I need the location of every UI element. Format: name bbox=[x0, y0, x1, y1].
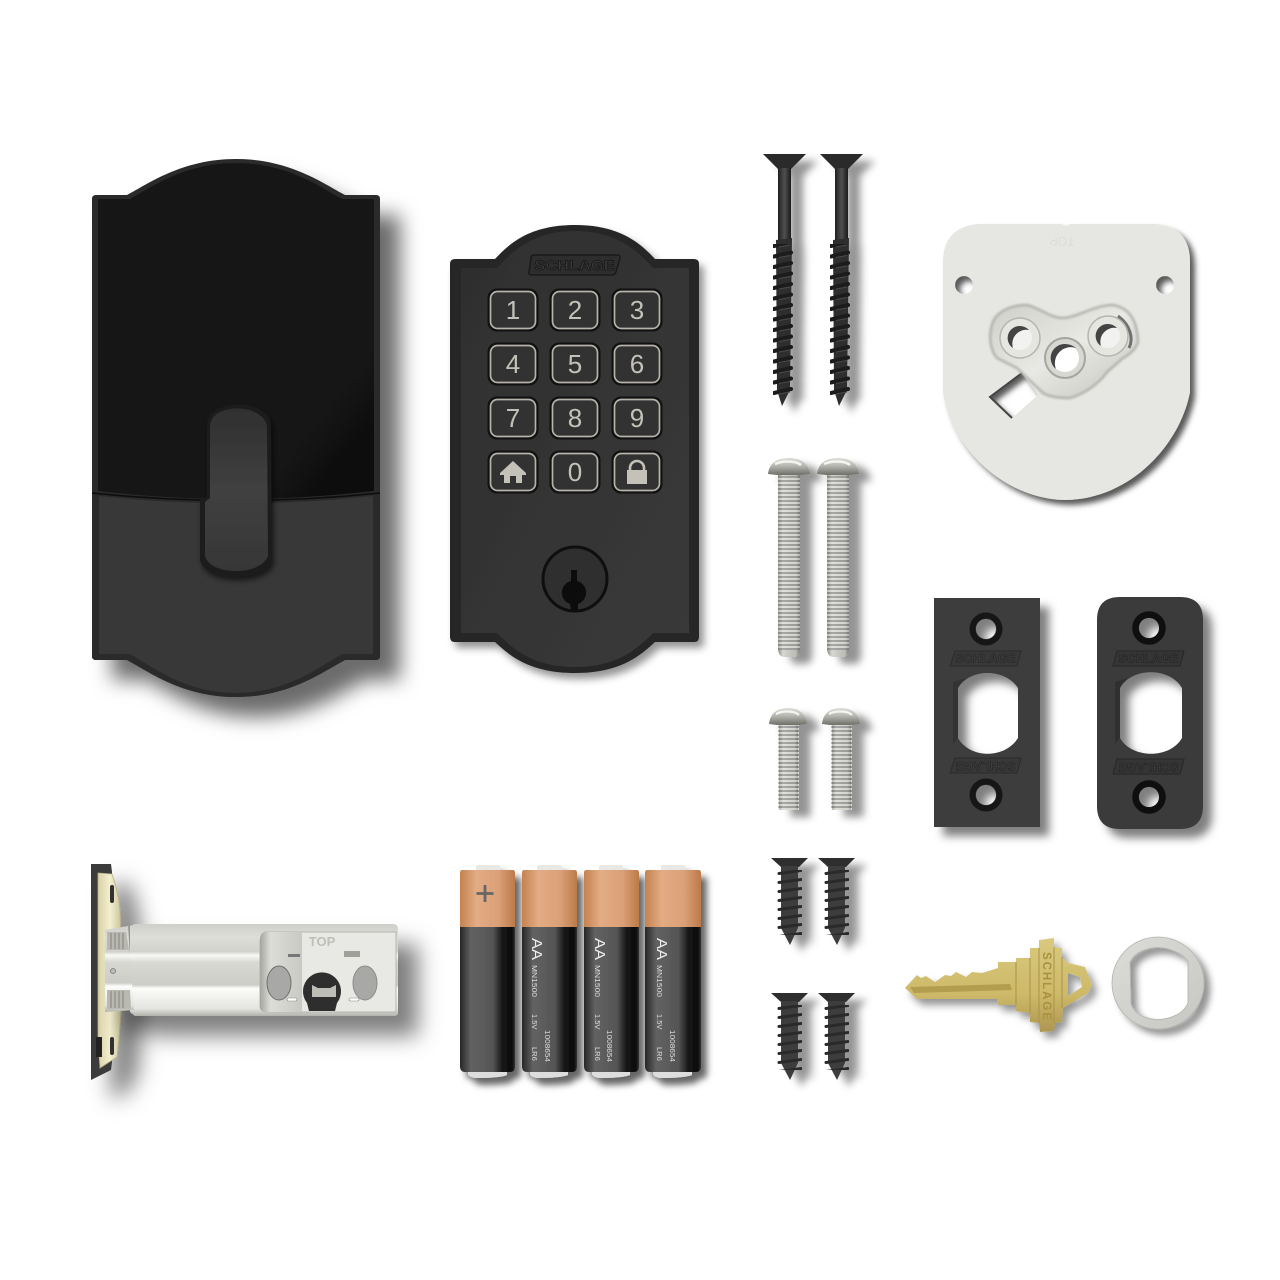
battery 1 bbox=[460, 865, 515, 1078]
rounded plate bottom logo bbox=[1113, 759, 1184, 774]
battery 4: 1.5V bbox=[655, 1014, 664, 1029]
keypad housing bbox=[450, 225, 699, 673]
battery 2: LR6 bbox=[530, 1047, 539, 1061]
key blade groove bbox=[910, 984, 1012, 993]
battery 3: 1008654 bbox=[605, 1030, 614, 1062]
rounded plate body bbox=[1097, 597, 1203, 829]
key silhouette bbox=[905, 938, 1092, 1032]
key 4 bbox=[489, 344, 537, 384]
latch tube and case bbox=[105, 924, 398, 1016]
key brand text: SCHLAGE bbox=[1040, 952, 1052, 1020]
key 1 bbox=[489, 290, 537, 330]
plate TOP mark: TOP bbox=[1050, 234, 1074, 248]
brand logo badge: SCHLAGE bbox=[534, 257, 614, 273]
key 5 bbox=[551, 344, 599, 384]
latch case face: TOP bbox=[309, 934, 336, 949]
interior assembly with thumbturn bbox=[92, 159, 380, 697]
rounded plate screw holes bbox=[1136, 614, 1162, 810]
long black wood screws bbox=[763, 154, 863, 406]
battery 2 bbox=[522, 865, 577, 1078]
battery 2: 1.5V bbox=[530, 1014, 539, 1029]
battery 3: LR6 bbox=[593, 1047, 602, 1061]
key cylinder bbox=[543, 547, 607, 611]
battery 2: AA bbox=[528, 938, 545, 960]
square strike plate bbox=[934, 598, 1040, 827]
slot inner edge bbox=[990, 373, 1022, 418]
raised steel bracket bbox=[990, 305, 1138, 398]
battery 3 bbox=[584, 865, 639, 1078]
rounded opening bevel bbox=[1115, 678, 1128, 744]
battery 4: 1008654 bbox=[668, 1030, 677, 1062]
battery 4: LR6 bbox=[655, 1047, 664, 1061]
upper short black screws bbox=[771, 858, 855, 945]
battery 3: MN1500 bbox=[593, 965, 602, 997]
rounded plate top logo: SCHLAGE bbox=[1118, 654, 1179, 666]
key 3: 3 bbox=[630, 295, 644, 325]
top logo: SCHLAGE bbox=[956, 654, 1016, 666]
opening bevel bbox=[953, 678, 966, 744]
key 6 bbox=[613, 344, 661, 384]
square plate body bbox=[934, 598, 1040, 827]
key 8 bbox=[551, 398, 599, 438]
key 1: 1 bbox=[506, 295, 520, 325]
home key bbox=[489, 452, 537, 492]
brand logo badge bbox=[529, 255, 620, 275]
AA batteries bbox=[460, 865, 701, 1078]
bottom logo: SCHLAGE bbox=[955, 759, 1016, 771]
key 2 bbox=[551, 290, 599, 330]
zero key bbox=[551, 452, 599, 492]
zero key: 0 bbox=[568, 457, 582, 487]
deadbolt latch bbox=[91, 864, 398, 1080]
mounting plate bbox=[943, 224, 1190, 500]
key 9 bbox=[613, 398, 661, 438]
key 3 bbox=[613, 290, 661, 330]
countersunk screw holes bbox=[972, 616, 1000, 808]
exterior keypad assembly bbox=[450, 225, 699, 673]
long silver machine screws bbox=[768, 458, 859, 657]
rounded plate top logo bbox=[1113, 651, 1184, 666]
key 6: 6 bbox=[630, 349, 644, 379]
key head ridges bbox=[1016, 947, 1062, 1023]
battery 3: 1.5V bbox=[593, 1014, 602, 1029]
plate body bbox=[943, 224, 1190, 500]
lower short black screws bbox=[771, 993, 855, 1080]
latch case face bbox=[260, 932, 396, 1012]
key 5: 5 bbox=[568, 349, 582, 379]
spacer ring bbox=[1112, 937, 1204, 1029]
rounded strike plate bbox=[1097, 597, 1203, 829]
key 8: 8 bbox=[568, 403, 582, 433]
battery 2: MN1500 bbox=[530, 965, 539, 997]
latch face plate bbox=[91, 864, 122, 1080]
battery 2: 1008654 bbox=[543, 1030, 552, 1062]
top logo bbox=[950, 651, 1021, 666]
battery 4 bbox=[645, 865, 701, 1078]
key 9: 9 bbox=[630, 403, 644, 433]
thumbturn bbox=[200, 404, 272, 576]
key 7: 7 bbox=[506, 403, 520, 433]
bottom logo bbox=[950, 758, 1021, 773]
battery 3: AA bbox=[591, 938, 608, 960]
key 4: 4 bbox=[506, 349, 520, 379]
back plate housing bbox=[92, 159, 380, 697]
key 7 bbox=[489, 398, 537, 438]
short silver machine screws bbox=[769, 708, 860, 810]
key 2: 2 bbox=[568, 295, 582, 325]
brass key bbox=[905, 938, 1092, 1032]
battery 4: AA bbox=[653, 938, 670, 960]
battery 4: MN1500 bbox=[655, 965, 664, 997]
rounded plate bottom logo: SCHLAGE bbox=[1118, 760, 1178, 772]
lock key bbox=[613, 452, 661, 492]
